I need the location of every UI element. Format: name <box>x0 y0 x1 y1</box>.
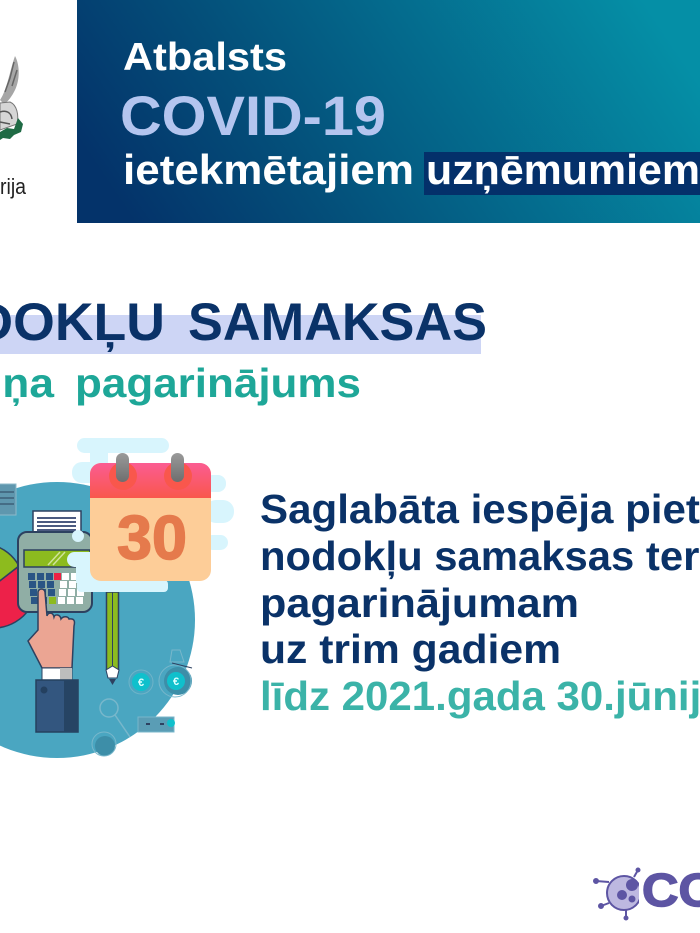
illustration: calculator and calendar <box>0 438 234 758</box>
panel: header banner <box>77 0 700 223</box>
icon: small document <box>0 484 16 515</box>
section title: nodokļu samaksas: SAMAKSAS <box>188 293 487 352</box>
icon: money bag <box>159 650 192 697</box>
footer logo: COVID-19 <box>594 864 700 920</box>
icon: calculator <box>18 532 92 612</box>
icon: magnifier <box>100 699 130 737</box>
section subtitle: termiņa pagarinājums: pagarinājums <box>75 360 361 406</box>
icon: euro coin: € <box>138 677 144 689</box>
icon: euro coin <box>129 670 153 694</box>
illustration background circle <box>0 482 195 758</box>
chart: pie icon <box>0 545 31 628</box>
cloud shape behind calendar <box>67 438 234 592</box>
heading: uzņēmumiem highlighted: uzņēmumiem <box>426 146 700 194</box>
text block: support description: uz trim gadiem <box>260 626 561 672</box>
text: ministry name fragment: rija <box>0 174 27 199</box>
heading: Atbalsts: Atbalsts <box>123 36 287 79</box>
icon: calendar: 30 <box>117 504 187 573</box>
icon: banknote <box>138 717 175 732</box>
icon: shirt cuff <box>42 668 72 680</box>
heading: ietekmētajiem: ietekmētajiem <box>123 146 414 193</box>
logo: ministry crest and name <box>0 56 27 199</box>
heading: COVID-19: COVID-19 <box>120 84 386 147</box>
icon: pointing hand <box>28 589 78 732</box>
text block: support description: pagarinājumam <box>260 580 579 626</box>
section title: nodokļu samaksas <box>0 293 487 354</box>
icon: pencil <box>106 592 119 685</box>
text block: support description <box>260 486 700 719</box>
icon: paper receipt <box>33 511 81 543</box>
icon: jacket sleeve <box>36 680 78 732</box>
icon: money bag: € <box>173 676 179 688</box>
icon: small pie <box>92 732 116 756</box>
icon: calendar <box>90 453 211 581</box>
icon: griffin crest <box>0 56 23 140</box>
icon: virus <box>594 868 643 920</box>
